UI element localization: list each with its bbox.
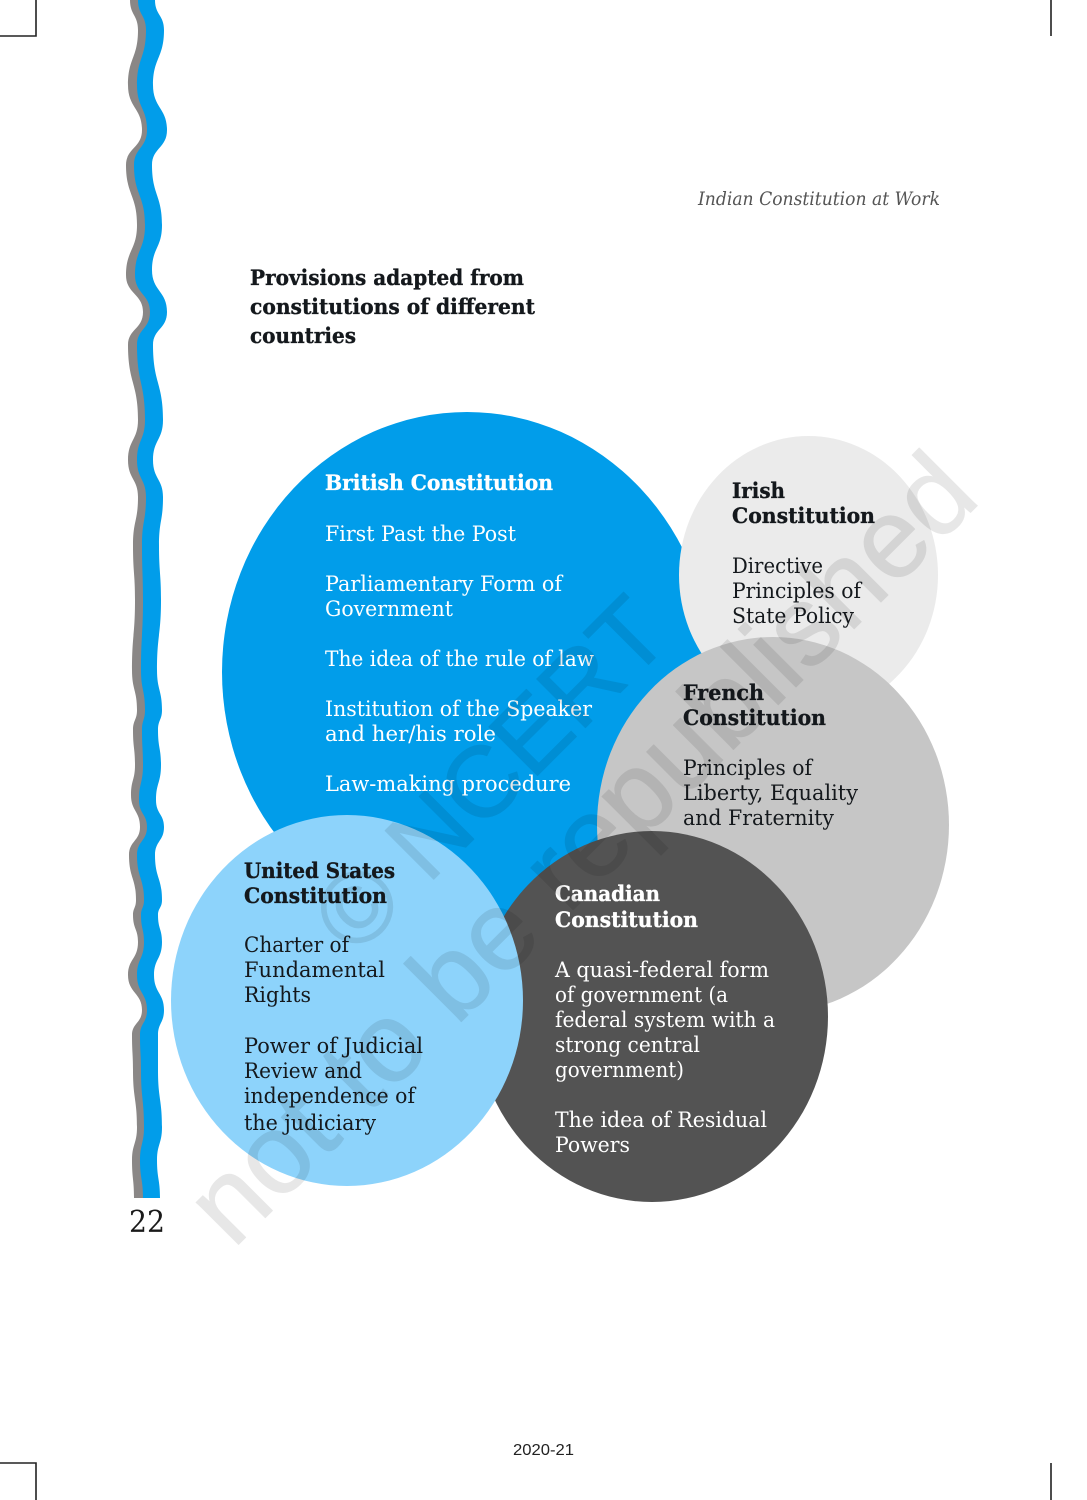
list: French provisions: Liberty, Equality: [683, 781, 859, 806]
list: Irish provisions: Principles of: [732, 579, 863, 604]
list: United States provisions: [244, 933, 423, 1136]
list: Canadian provisions: [554, 958, 775, 1158]
edition year: 2020-21: [513, 1442, 574, 1459]
heading: United States: United States: [244, 859, 395, 884]
watermark: © NCERT: [291, 575, 689, 974]
heading: Irish: Irish: [732, 479, 785, 504]
list: French provisions: [683, 756, 859, 831]
circle: Canadian: [476, 831, 828, 1202]
list: United States provisions: the judiciary: [244, 1111, 377, 1136]
list: British provisions: [325, 522, 595, 797]
list: Irish provisions: State Policy: [732, 604, 855, 629]
heading: Canadian: Constitution: [555, 908, 698, 933]
title: Provisions adapted from: [250, 266, 524, 291]
heading: French: [683, 681, 826, 731]
running header: Indian Constitution at Work: [697, 188, 940, 210]
list: British provisions: Institution of the Speaker: [325, 697, 593, 722]
list: French provisions: and Fraternity: [683, 806, 835, 831]
panel: British Constitution: [222, 412, 712, 932]
list: Irish provisions: [732, 554, 863, 629]
title: countries: [250, 324, 356, 349]
heading: French: Constitution: [683, 706, 826, 731]
list: Canadian provisions: A quasi-federal form: [554, 958, 769, 983]
list: Canadian provisions: government): [555, 1058, 684, 1083]
heading: Irish: Constitution: [732, 504, 875, 529]
panel: Canadian Constitution: [476, 831, 828, 1202]
circle: United States: [171, 815, 523, 1186]
heading: Irish: [732, 479, 875, 529]
list: Canadian provisions: The idea of Residual: [555, 1108, 767, 1133]
circle: French: [597, 637, 949, 1013]
watermark: not to be republished: [161, 428, 1000, 1267]
list: Canadian provisions: strong central: [555, 1033, 700, 1058]
list: United States provisions: Review and: [244, 1059, 362, 1084]
panel: United States Constitution: [171, 815, 523, 1186]
list: Canadian provisions: Powers: [555, 1133, 630, 1158]
list: United States provisions: Power of Judicial: [244, 1034, 423, 1059]
wavy side strip: [126, 0, 167, 1198]
panel: French Constitution: [597, 637, 949, 1013]
list: United States provisions: Charter of: [244, 933, 351, 958]
list: British provisions: Parliamentary Form of: [325, 572, 564, 597]
panel: Irish Constitution: [679, 436, 938, 714]
list: United States provisions: independence of: [244, 1084, 417, 1109]
list: British provisions: The idea of the rule of law: [325, 647, 595, 672]
list: British provisions: Government: [325, 597, 453, 622]
title: [250, 266, 535, 349]
page number: 22: [129, 1205, 165, 1240]
heading: British: British Constitution: [325, 471, 553, 496]
list: Canadian provisions: federal system with a: [555, 1008, 775, 1033]
heading: United States: [244, 859, 395, 909]
circle: British: [222, 412, 712, 932]
list: United States provisions: Fundamental: [244, 958, 385, 983]
list: Irish provisions: Directive: [732, 554, 823, 579]
list: United States provisions: Rights: [244, 983, 311, 1008]
heading: Canadian: Canadian: [555, 882, 660, 907]
list: French provisions: Principles of: [683, 756, 814, 781]
circle: Irish: [679, 436, 938, 714]
list: British provisions: and her/his role: [325, 722, 496, 747]
heading: French: French: [683, 681, 764, 706]
list: British provisions: First Past the Post: [325, 522, 516, 547]
list: British provisions: Law-making procedure: [325, 772, 571, 797]
title: constitutions of different: [250, 295, 535, 320]
heading: United States: Constitution: [244, 884, 387, 909]
list: Canadian provisions: of government (a: [555, 983, 728, 1008]
heading: Canadian: [555, 882, 698, 933]
